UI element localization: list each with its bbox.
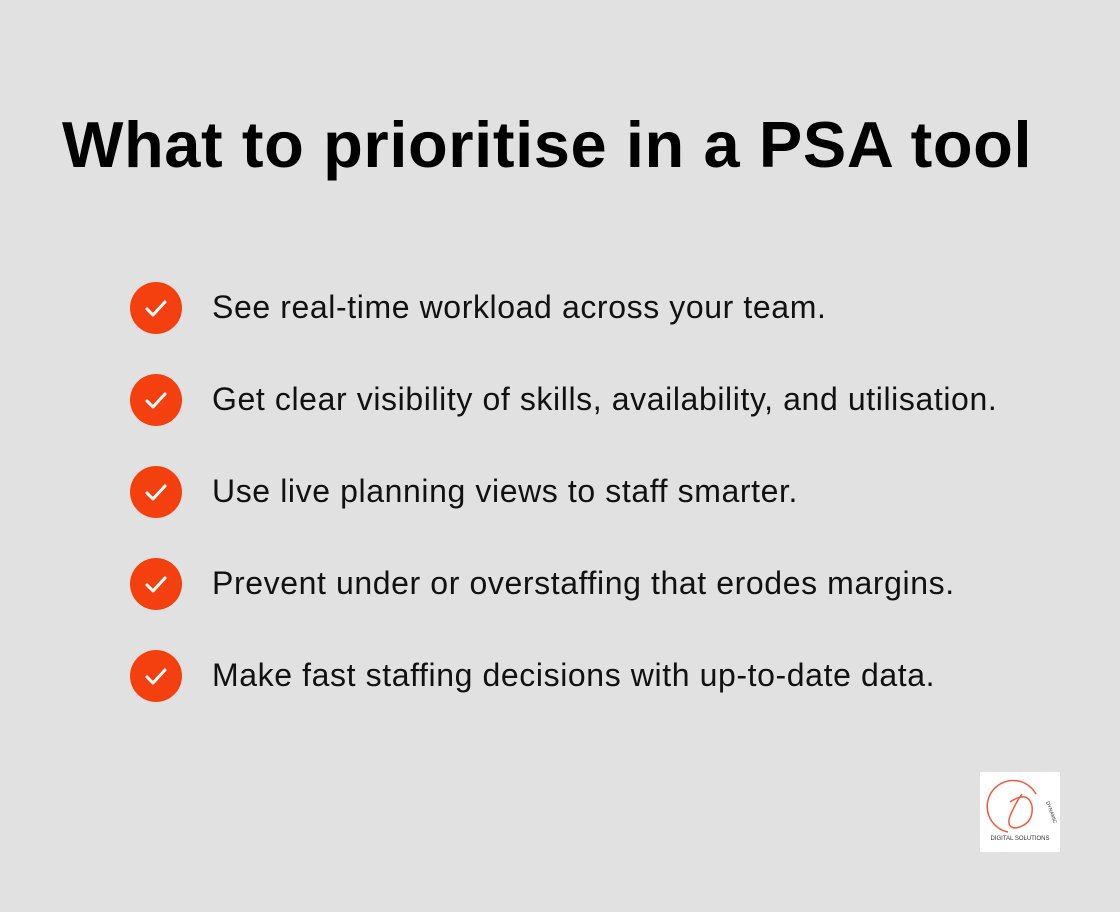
item 5 (130, 650, 935, 702)
logo: DYNAMIC (1044, 801, 1058, 825)
item 4 (130, 558, 955, 610)
icon: check (130, 374, 182, 426)
text: Make fast staffing decisions with up-to-date data. (212, 657, 935, 693)
logo (980, 772, 1060, 852)
title: What to prioritise in a PSA tool (62, 108, 1032, 181)
icon: check (130, 650, 182, 702)
text: See real-time workload across your team. (212, 289, 826, 325)
icon: check (130, 466, 182, 518)
icon: check (130, 282, 182, 334)
item 2 (130, 374, 997, 426)
logo: DIGITAL SOLUTIONS (990, 836, 1050, 842)
text: Use live planning views to staff smarter. (212, 473, 798, 509)
icon: check (130, 558, 182, 610)
text: Get clear visibility of skills, availability, and utilisation. (212, 381, 997, 417)
text: Prevent under or overstaffing that erodes margins. (212, 565, 955, 601)
item 1 (130, 282, 826, 334)
item 3 (130, 466, 798, 518)
